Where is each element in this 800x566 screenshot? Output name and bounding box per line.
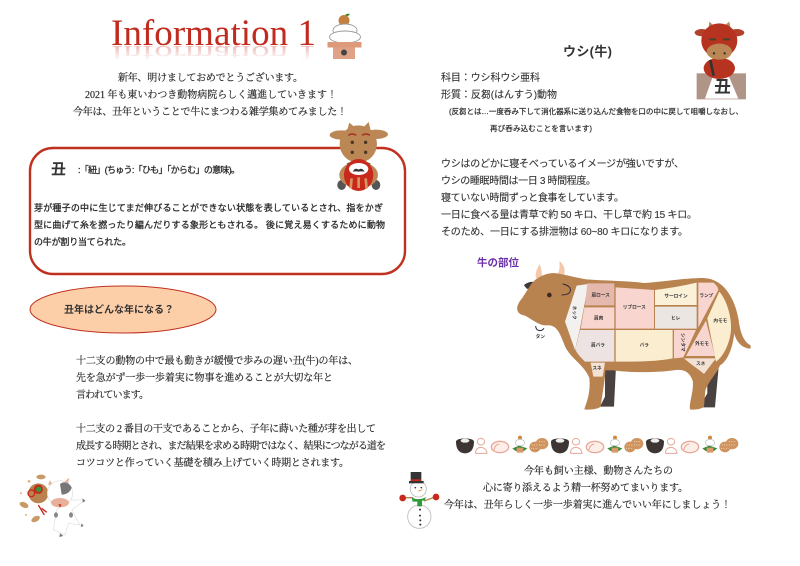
heading ellipse (30, 286, 216, 333)
title: Information 1 (111, 41, 316, 66)
cut: rump (698, 283, 718, 327)
back legs (600, 360, 719, 407)
heading ellipse: 丑年はどんな年になる？ (64, 303, 174, 316)
cut labels (536, 292, 728, 371)
greeting text: 今年は、丑年ということで牛にまつわる雑学集めてみました！ (73, 105, 347, 118)
chart: cow cuts diagram (517, 261, 751, 410)
kanji heading: 丑 (51, 161, 66, 178)
cut: round tip (674, 330, 696, 358)
closing message: 心に寄り添えるよう精一杯努めてまいります。 (483, 481, 688, 494)
cut: inner thigh (707, 292, 731, 362)
cut labels: 外モモ (695, 340, 709, 347)
cut: rib loin (616, 287, 654, 329)
cut labels: スネ (592, 364, 602, 371)
text: taxonomy: 科目：ウシ科ウシ亜科 (441, 71, 540, 84)
title: Information 1 (111, 13, 316, 54)
text: ox habits: 寝ていない時間ずっと食事をしています。 (441, 191, 624, 204)
heading: ushi: ウシ(牛) (563, 44, 612, 59)
cut labels: 肩ロース (591, 293, 610, 299)
icon: cow holding daruma (330, 122, 388, 191)
text: ox habits: 一日に食べる量は青草で約 50 キロ、干し草で約 15 キロ。 (441, 208, 697, 221)
panel body text (34, 202, 385, 247)
icon: dancing cow with lion mask (19, 475, 85, 537)
closing message: 今年も飼い主様、動物さんたちの (524, 464, 673, 477)
cow body (517, 273, 751, 410)
horns and ear (536, 261, 565, 281)
text: taxonomy: (反芻とは…一度呑み下して消化器系に送り込んだ食物を口の中に戻して咀嚼しなおし、 (449, 106, 743, 116)
greeting text (73, 71, 347, 118)
cut labels: 肩肉 (594, 314, 604, 321)
ornament row: new year foods (456, 436, 738, 453)
cut labels: サーロイン (664, 293, 688, 299)
icon: kagami mochi (328, 14, 362, 59)
cut: outer thigh (686, 321, 715, 356)
cut: chuck loin (585, 283, 614, 305)
cut labels: バラ (640, 342, 649, 348)
ornament set 3 (646, 436, 738, 453)
cut labels: リブロース (623, 304, 646, 311)
text: taxonomy: 形質：反芻(はんすう)動物 (441, 88, 557, 101)
text: about the ox year: 言われています。 (76, 389, 149, 401)
text: taxonomy: 再び呑み込むことを言います) (490, 123, 592, 133)
text: ox habits: そのため、一日にする排泄物は 60~80 キロになります。 (441, 225, 688, 238)
cut: sirloin (655, 283, 697, 305)
icon: snowman (399, 472, 439, 528)
cut labels: スネ (696, 360, 706, 367)
cut labels: 肩バラ (591, 342, 605, 348)
text: ox habits (441, 157, 697, 238)
ornament set 1 (456, 436, 548, 453)
cut labels: 内モモ (713, 317, 728, 324)
ornament set 2 (551, 436, 643, 453)
cut: neck (565, 284, 588, 350)
text: ox habits: ウシはのどかに寝そべっているイメージが強いですが、 (441, 157, 684, 170)
cut: brisket (575, 330, 614, 362)
kanji meaning: :「紐」(ちゅう:「ひも」「からむ」の意味)。 (78, 164, 240, 175)
text: about the ox year: 十二支の動物の中で最も動きが緩慢で歩みの遅い丑(牛)の年は、 (76, 354, 358, 367)
cut: front shank (591, 363, 605, 377)
cut labels: ヒレ (671, 315, 681, 320)
cut labels: ランプ (699, 292, 714, 299)
closing message (444, 464, 731, 511)
greeting text: 新年、明けましておめでとうございます。 (118, 71, 303, 84)
panel body text: 芽が種子の中に生じてまだ伸びることができない状態を表しているとされ、指をかぎ (34, 202, 383, 213)
cut: rear shank (684, 358, 716, 374)
text: about the ox year: 成長する時期とされ、まだ結果を求める時期ではなく、結果につながる道を (76, 439, 386, 452)
text: taxonomy (441, 71, 743, 133)
cut: shoulder (581, 307, 614, 329)
icon: cow writing calligraphy (695, 22, 746, 99)
cut labels: ネック (571, 306, 578, 320)
text: about the ox year: コツコツと作っていく基礎を積み上げていく時期とされます。 (76, 456, 349, 469)
cut labels: シンタマ (679, 333, 686, 352)
text: ox habits: ウシの睡眠時間は一日 3 時間程度。 (441, 174, 596, 187)
text: about the ox year: 先を急がず一歩一歩着実に物事を進めることが大切な年と (76, 371, 333, 384)
greeting text: 2021 年も東いわつき動物病院らしく邁進していきます！ (85, 88, 337, 101)
heading: cow parts: 牛の部位 (477, 256, 520, 269)
panel: meaning of 丑 (30, 148, 405, 274)
panel body text: 型に曲げて糸を撚ったり編んだりする象形ともされる。 後に覚え易くするために動物 (34, 219, 385, 230)
closing message: 今年は、丑年らしく一歩一歩着実に進んでいい年にしましょう！ (444, 498, 731, 511)
text: about the ox year (76, 354, 386, 469)
cut: tenderloin (655, 307, 697, 329)
cut labels: タン (536, 333, 545, 340)
text: about the ox year: 十二支の 2 番目の干支であることから、子年に蒔いた種が芽を出して (76, 422, 376, 435)
cut: flank (616, 330, 673, 362)
panel body text: の牛が割り当てられた。 (34, 236, 131, 247)
eye and face lines (547, 293, 552, 297)
icon: cow writing calligraphy: 丑 (714, 78, 731, 97)
